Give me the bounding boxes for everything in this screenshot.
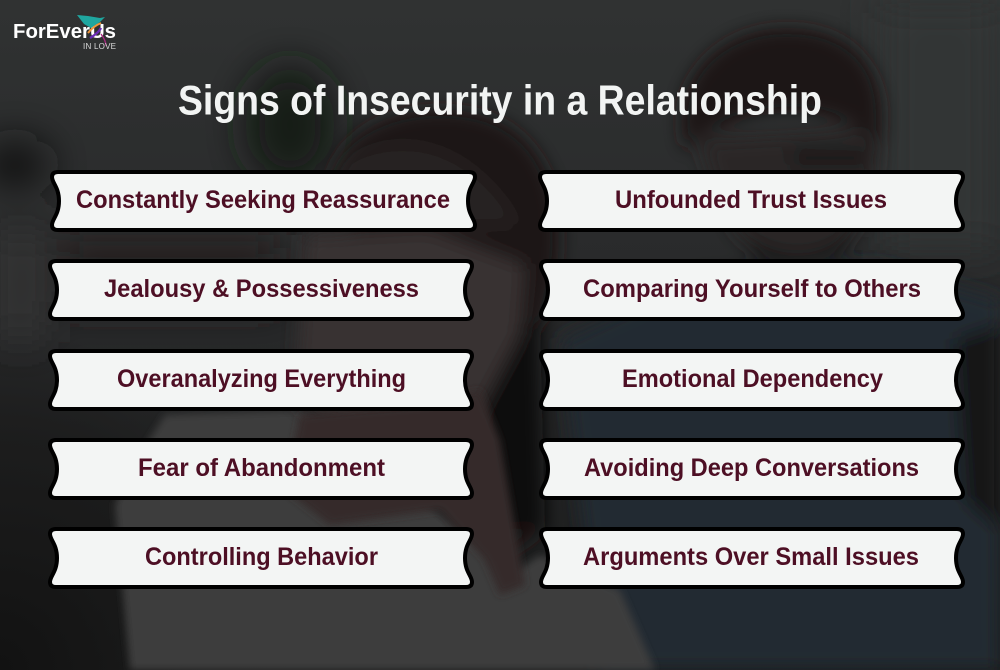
- card: Unfounded Trust Issues: [540, 172, 963, 230]
- card: Unfounded Trust Issues: Unfounded Trust Issues: [615, 186, 887, 214]
- card: Jealousy & Possessiveness: [50, 261, 472, 319]
- card: Controlling Behavior: Controlling Behavior: [145, 543, 378, 571]
- card: Constantly Seeking Reassurance: [52, 172, 475, 230]
- logo: [13, 15, 116, 51]
- card: Emotional Dependency: Emotional Dependency: [622, 365, 883, 393]
- card: Arguments Over Small Issues: Arguments Over Small Issues: [583, 543, 919, 571]
- title: Signs of Insecurity in a Relationship: [178, 76, 822, 124]
- logo icon: hummingbird: [77, 15, 106, 46]
- card: Controlling Behavior: [50, 529, 472, 587]
- card: Comparing Yourself to Others: [541, 261, 963, 319]
- card: Comparing Yourself to Others: Comparing Yourself to Others: [583, 275, 921, 303]
- card: Avoiding Deep Conversations: [541, 440, 963, 498]
- card: Fear of Abandonment: Fear of Abandonment: [138, 454, 386, 482]
- man: [560, 28, 1000, 670]
- card: Jealousy & Possessiveness: Jealousy & Possessiveness: [104, 275, 419, 303]
- logo wordmark: ForEverUs: [13, 21, 116, 43]
- card: Constantly Seeking Reassurance: Constantly Seeking Reassurance: [76, 186, 450, 214]
- card: Emotional Dependency: [541, 351, 963, 409]
- card: Arguments Over Small Issues: [541, 529, 963, 587]
- woman: [115, 410, 655, 670]
- card: Avoiding Deep Conversations: Avoiding Deep Conversations: [584, 454, 919, 482]
- logo tagline: IN LOVE: [83, 42, 116, 51]
- card: Overanalyzing Everything: Overanalyzing Everything: [117, 365, 406, 393]
- card: Overanalyzing Everything: [50, 351, 472, 409]
- card: Fear of Abandonment: [50, 440, 472, 498]
